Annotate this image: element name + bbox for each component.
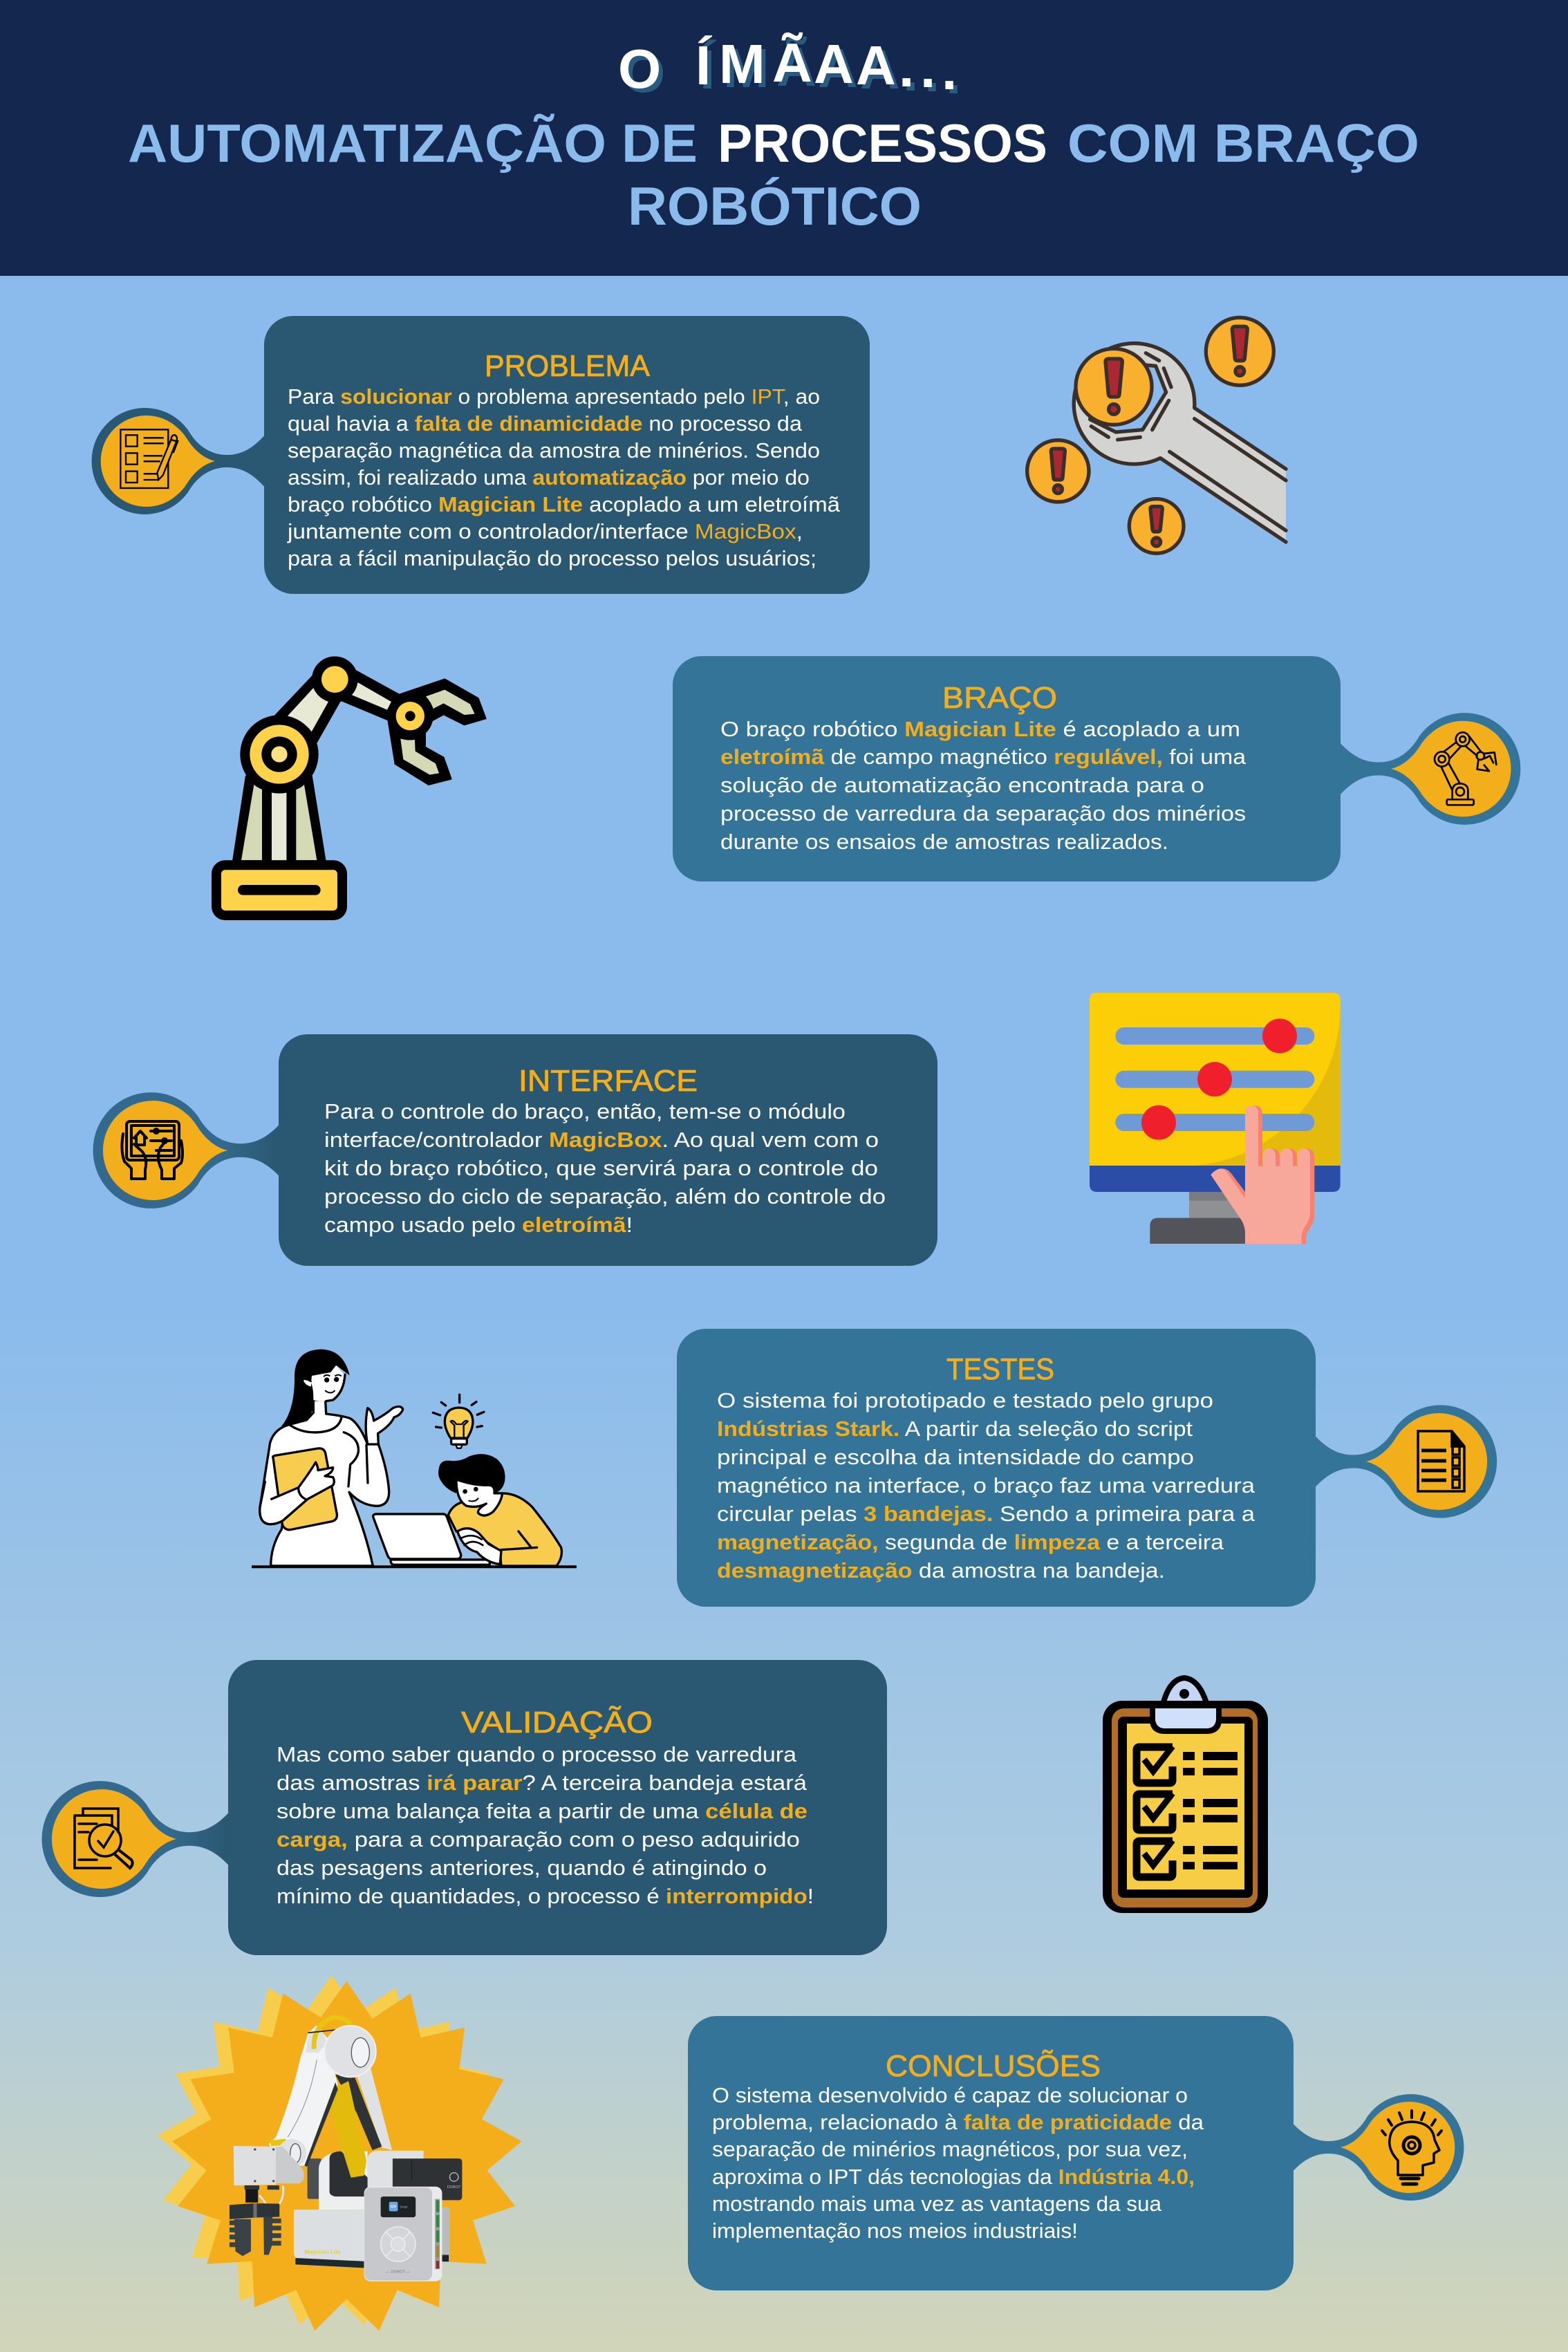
- subtitle line 1 end: COM BRAÇO: [1067, 113, 1419, 174]
- heading: CONCLUSÕES: [886, 2048, 1101, 2083]
- illustration: robot arm: [216, 656, 486, 915]
- body text: das pesagens anteriores, quando é atingindo o: [277, 1856, 767, 1880]
- body text: separação magnética da amostra de minérios. Sendo: [288, 438, 820, 463]
- boy hand: [458, 1529, 501, 1565]
- body text: aproxima o IPT dás tecnologias da Indústria 4.0,: [712, 2165, 1195, 2189]
- tablet: [273, 1448, 337, 1530]
- gripper top: [399, 679, 486, 725]
- joints: [312, 656, 358, 702]
- body text: principal e escolha da intensidade do campo: [717, 1445, 1194, 1469]
- gripper: [279, 2186, 283, 2205]
- MagicBox controller: [364, 2187, 449, 2281]
- base: [216, 865, 342, 915]
- connector bubble: [1312, 1405, 1497, 1518]
- heading: VALIDAÇÃO: [461, 1705, 653, 1739]
- callout body: [264, 316, 870, 594]
- body text: Mas como saber quando o processo de varredura: [277, 1742, 797, 1766]
- body text: O braço robótico Magician Lite é acoplado a um: [720, 717, 1240, 741]
- body text: processo do ciclo de separação, além do controle do: [324, 1184, 886, 1208]
- panel: interface: [93, 1034, 937, 1266]
- body text: Indústrias Stark. A partir da seleção do script: [717, 1417, 1193, 1441]
- body text: juntamente com o controlador/interface MagicBox ,: [287, 519, 803, 543]
- body text: [712, 2083, 1204, 2243]
- body text: solução de automatização encontrada para o: [720, 773, 1204, 797]
- icon: bulb head with gear: [1382, 2111, 1441, 2184]
- MagicBox controller: Script: [400, 2205, 408, 2209]
- panel: problema: [92, 316, 870, 594]
- callout body: [279, 1034, 937, 1266]
- column: [232, 776, 327, 866]
- icon: robot arm: [1435, 732, 1496, 805]
- connector bubble: [93, 1092, 283, 1208]
- forearm: [340, 669, 401, 721]
- ground line: [252, 1562, 577, 1571]
- check row 2: [1137, 1793, 1238, 1830]
- heading: PROBLEMA: [485, 349, 651, 383]
- subtitle line 1 start: AUTOMATIZAÇÃO DE: [128, 113, 698, 174]
- body text: durante os ensaios de amostras realizados.: [720, 830, 1168, 854]
- callout body: [688, 2016, 1294, 2290]
- heading: TESTES: [946, 1352, 1054, 1386]
- illustration: Magician Lite robot on starburst: [158, 1975, 522, 2331]
- header band: [0, 0, 1568, 276]
- MagicBox controller: — DOBOT —: [386, 2270, 411, 2274]
- body text: assim, foi realizado uma automatização por meio do: [288, 465, 810, 489]
- icon: document checklist: [1418, 1431, 1464, 1491]
- heading: INTERFACE: [519, 1064, 698, 1098]
- body text: qual havia a falta de dinamicidade no processo da: [288, 411, 803, 436]
- body text: interface/controlador MagicBox . Ao qual vem com o: [324, 1128, 879, 1152]
- check row 3: [1137, 1840, 1238, 1877]
- hand: [1217, 1105, 1314, 1244]
- body text: mínimo de quantidades, o processo é interrompido !: [277, 1884, 814, 1908]
- panel: testes: [677, 1329, 1497, 1607]
- body text: sobre uma balança feita a partir de uma célula de: [277, 1799, 808, 1823]
- gripper bottom: [389, 721, 451, 785]
- icon: checklist with pen: [120, 429, 178, 488]
- callout body: [677, 1329, 1316, 1607]
- laptop: [391, 1560, 489, 1565]
- connector bubble: [1337, 713, 1520, 825]
- body text: mostrando mais uma vez as vantagens da sua: [712, 2192, 1162, 2216]
- body text: processo de varredura da separação dos minérios: [720, 801, 1246, 825]
- sweater: [448, 1493, 561, 1566]
- body text: problema, relacionado à falta de praticidade da: [712, 2110, 1204, 2134]
- panel: braço: [673, 656, 1520, 881]
- body text: carga, para a comparação com o peso adquirido: [277, 1827, 800, 1851]
- callout body: [673, 656, 1341, 881]
- body text: circular pelas 3 bandejas. Sendo a primeira para a: [717, 1502, 1256, 1526]
- body text: Para o controle do braço, então, tem-se o módulo: [324, 1099, 846, 1123]
- icon: documents and magnifier: [75, 1809, 133, 1868]
- body text: O sistema desenvolvido é capaz de solucionar o: [712, 2083, 1188, 2107]
- face: [311, 1365, 345, 1401]
- panel: conclusões: [688, 2016, 1464, 2290]
- base bottom: [294, 2210, 365, 2268]
- body text: para a fácil manipulação do processo pelos usuários;: [288, 546, 816, 570]
- body text: eletroímã de campo magnético regulável, foi uma: [720, 745, 1247, 769]
- body text: [717, 1388, 1256, 1583]
- body text: O sistema foi prototipado e testado pelo grupo: [717, 1388, 1213, 1412]
- robot base parts: [308, 2158, 321, 2199]
- body text: magnetização, segunda de limpeza e a terceira: [717, 1530, 1224, 1554]
- icon: hands on tablet: [122, 1121, 183, 1179]
- subtitle highlighted word: PROCESSOS: [718, 113, 1047, 174]
- illustration: Magician Lite robot on starburst: DOBOT: [447, 2185, 461, 2190]
- body text: [287, 384, 841, 570]
- body text: Para solucionar o problema apresentado pelo IPT, ao: [288, 384, 820, 409]
- callout body: [228, 1660, 887, 1955]
- rear forearm: [353, 2056, 392, 2150]
- body text: [324, 1099, 886, 1237]
- woman body: [260, 1400, 389, 1566]
- body text: magnético na interface, o braço faz uma varredura: [717, 1473, 1256, 1497]
- illustration: Magician Lite robot on starburst: Magician Lite: [304, 2249, 341, 2255]
- check row 1: [1137, 1746, 1238, 1783]
- tool box: [276, 2147, 304, 2183]
- title: O ÍMÃAA...: [618, 32, 957, 101]
- hair: [281, 1350, 350, 1426]
- illustration: monitor with sliders: [1090, 993, 1341, 1244]
- illustration: wrench with warnings: [1027, 317, 1286, 553]
- illustration: woman and boy with laptop: [252, 1350, 577, 1567]
- upper arm: [269, 2025, 338, 2167]
- elbow joint: [270, 2138, 288, 2146]
- body text: braço robótico Magician Lite acoplado a um eletroímã: [288, 492, 841, 516]
- illustration: clipboard checklist: [1103, 1678, 1268, 1913]
- body text: [277, 1742, 814, 1908]
- connector bubble: [1289, 2094, 1464, 2201]
- connector bubble: [92, 408, 266, 514]
- subtitle line 2: ROBÓTICO: [628, 176, 922, 236]
- raised hand: [366, 1407, 403, 1444]
- body text: implementação nos meios industriais!: [712, 2219, 1078, 2243]
- upper arm: [274, 673, 341, 743]
- heading: BRAÇO: [942, 681, 1057, 715]
- body text: das amostras irá parar ? A terceira bandeja estará: [277, 1771, 808, 1795]
- body text: separação de minérios magnéticos, por sua vez,: [712, 2137, 1188, 2161]
- body text: desmagnetização da amostra na bandeja.: [717, 1558, 1165, 1583]
- title shadow: O ÍMÃAA...: [622, 36, 961, 105]
- body text: campo usado pelo eletroímã !: [324, 1213, 633, 1237]
- body text: [720, 717, 1247, 854]
- panel: validação: [42, 1660, 887, 1955]
- MagicBox controller: </>: [390, 2205, 397, 2210]
- boy head: [456, 1480, 503, 1515]
- holding arm: [260, 1462, 334, 1524]
- body text: kit do braço robótico, que servirá para o controle do: [324, 1156, 878, 1180]
- lightbulb: [445, 1408, 473, 1438]
- connector bubble: [42, 1781, 232, 1897]
